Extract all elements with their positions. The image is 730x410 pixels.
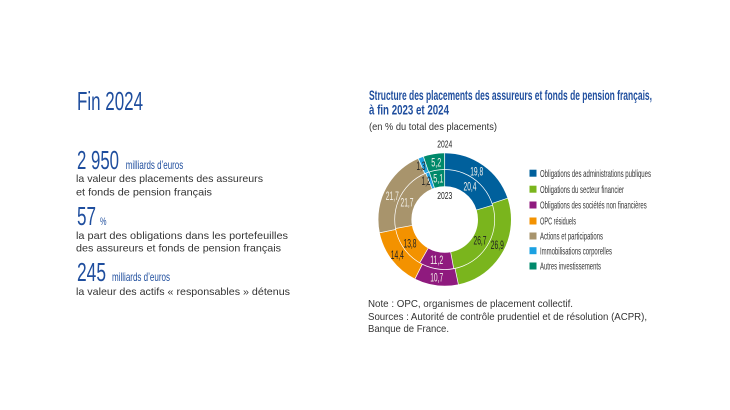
note and sources: Sources : Autorité de contrôle prudentiel et de résolution (ACPR), [368, 311, 647, 323]
legend: Obligations des sociétés non financières [540, 200, 647, 212]
key figure: 57 % [76, 201, 288, 255]
key figure: 245 milliards d'euros [76, 257, 290, 298]
year label 2023: 2023 [437, 190, 452, 202]
data labels: 5,1 [433, 171, 443, 185]
key figure: 2 950 milliards d'euros: et fonds de pension français [76, 186, 212, 198]
data labels: 5,2 [431, 155, 441, 169]
key figure: 57 %: 57 [77, 201, 96, 231]
key figure: 2 950 milliards d'euros: 2 950 [77, 145, 119, 175]
key figure: 2 950 milliards d'euros [76, 145, 263, 198]
key figure: 57 %: des assureurs et fonds de pension français [76, 243, 281, 255]
legend: Obligations des administrations publiques [540, 168, 651, 180]
key figure: 2 950 milliards d'euros: milliards d’euros [126, 158, 183, 172]
legend [530, 168, 651, 273]
chart title [369, 88, 652, 117]
chart title: à fin 2023 et 2024 [369, 102, 449, 117]
legend: Obligations du secteur financier [540, 184, 624, 196]
note and sources: Note : OPC, organismes de placement collectif. [368, 298, 573, 310]
year label 2024: 2024 [437, 138, 452, 150]
data labels: 10,7 [430, 270, 443, 284]
data labels: 14,4 [391, 248, 404, 262]
outer ring: 2024 [387, 161, 503, 278]
note and sources [368, 298, 647, 335]
inner ring: 2023 [403, 178, 486, 261]
data labels: 1,3 [416, 159, 426, 173]
data labels: 21,7 [400, 195, 414, 209]
data labels: 21,7 [386, 189, 399, 203]
data labels: 1,2 [422, 174, 431, 188]
legend: Actions et participations [540, 231, 603, 243]
data labels: 19,8 [470, 165, 483, 179]
key figure: 57 %: % [100, 216, 107, 228]
key figure: 2 950 milliards d'euros: la valeur des placements des assureurs [76, 173, 263, 185]
key figure: 57 %: la part des obligations dans les portefeuilles [76, 230, 288, 242]
data labels: 13,8 [404, 236, 417, 250]
chart subtitle: (en % du total des placements) [369, 121, 497, 133]
key figure: 245 milliards d'euros: la valeur des actifs « responsables » détenus [76, 286, 290, 298]
data labels [386, 155, 504, 284]
heading: Fin 2024: Fin 2024 [77, 86, 143, 116]
donut chart [380, 138, 508, 285]
note and sources: Banque de France. [368, 323, 449, 335]
data labels: 20,4 [464, 180, 477, 194]
legend: Autres investissements [540, 261, 601, 273]
key figure: 245 milliards d'euros: milliards d’euros [112, 270, 170, 284]
data labels: 26,9 [491, 238, 504, 252]
legend: Immobilisations corporelles [540, 245, 612, 257]
key figure: 245 milliards d'euros: 245 [77, 257, 106, 287]
legend: OPC résiduels [540, 216, 576, 228]
data labels: 26,7 [474, 234, 487, 248]
data labels: 11,2 [430, 253, 443, 267]
